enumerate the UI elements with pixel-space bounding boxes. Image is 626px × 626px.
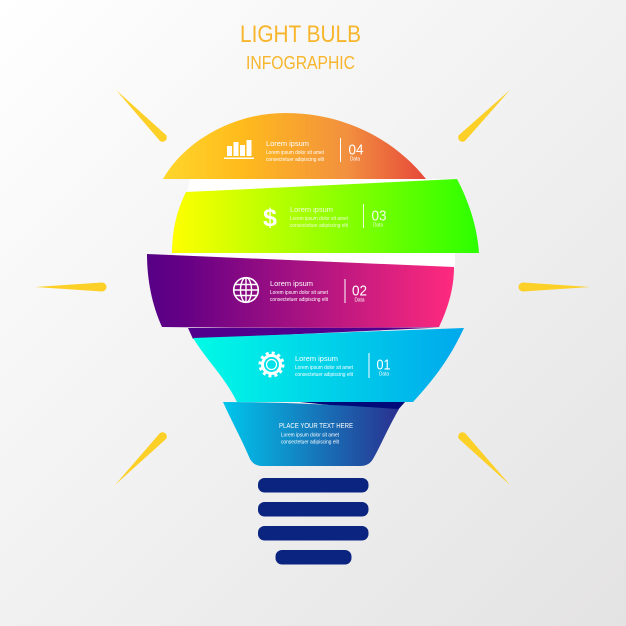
- panel: slice 04: [163, 113, 426, 179]
- text: slice 04: Data: [350, 156, 361, 162]
- text: slice 01: Lorem ipsum dolor sit amet: [295, 365, 354, 371]
- panel: bulb neck: [223, 402, 399, 466]
- bulb base bars: [258, 478, 368, 564]
- text: slice 03: Lorem ipsum dolor sit amet: [290, 216, 349, 222]
- text: slice 02: Data: [354, 298, 365, 304]
- text: neck: consectetuer adipiscing elit: [281, 440, 340, 446]
- text: slice 04: Lorem ipsum dolor sit amet: [266, 150, 325, 156]
- text: slice 02: 02: [352, 282, 367, 300]
- text: slice 01: 01: [376, 356, 390, 374]
- white bulb backing: [175, 179, 455, 268]
- title: [240, 21, 361, 73]
- text: slice 01: consectetuer adipiscing elit: [295, 372, 354, 378]
- dark fold under slice 01: [300, 402, 405, 412]
- panel: slice 03: [172, 179, 479, 253]
- title: INFOGRAPHIC: [246, 53, 355, 73]
- light rays: [35, 90, 590, 485]
- text: slice 02: Lorem ipsum dolor sit amet: [270, 290, 329, 296]
- panel: slice 02: [147, 254, 454, 328]
- text: slice 03: Data: [373, 222, 384, 228]
- text: slice 03: 03: [372, 208, 386, 224]
- text: slice 04: Lorem ipsum: [266, 141, 309, 148]
- icon: bar chart: [224, 140, 254, 159]
- text: slice 03: [290, 204, 386, 229]
- text: neck: PLACE YOUR TEXT HERE: [279, 423, 353, 430]
- text: neck: Lorem ipsum dolor sit amet: [281, 432, 340, 438]
- dark fold under slice 02: [188, 328, 440, 339]
- icon: gear: [260, 353, 283, 376]
- text: slice 03: Lorem ipsum: [290, 207, 333, 214]
- text: slice 01: [295, 353, 390, 378]
- text: slice 02: consectetuer adipiscing elit: [270, 297, 329, 303]
- text: slice 04: [266, 138, 364, 163]
- panel: slice 01: [193, 328, 464, 402]
- text: slice 01: Lorem ipsum: [295, 356, 338, 363]
- title: LIGHT BULB: [240, 21, 361, 48]
- text: slice 04: consectetuer adipiscing elit: [266, 157, 325, 163]
- icon: dollar: $: [263, 204, 277, 232]
- text: slice 02: Lorem ipsum: [270, 281, 313, 288]
- text: slice 01: Data: [379, 372, 390, 378]
- text: slice 04: 04: [348, 142, 364, 158]
- icon: globe: [234, 278, 258, 302]
- text: neck: [279, 423, 353, 446]
- text: slice 03: consectetuer adipiscing elit: [290, 223, 349, 229]
- text: slice 02: [270, 279, 367, 304]
